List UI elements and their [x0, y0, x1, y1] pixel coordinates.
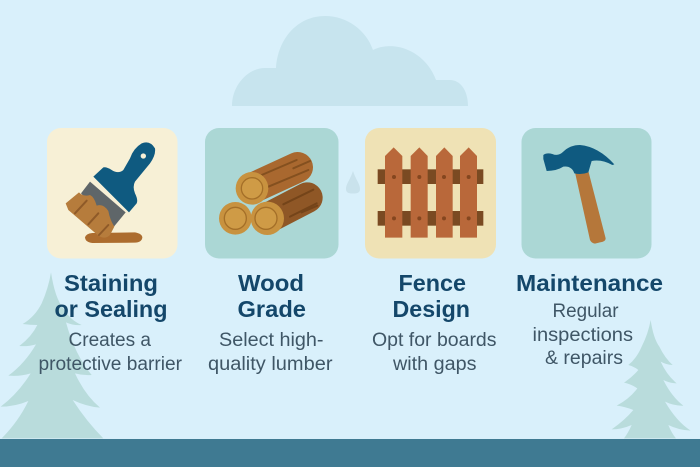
description: fence design: with gaps — [392, 354, 476, 375]
description: fence design — [372, 330, 496, 375]
panel: maintenance icon card — [522, 128, 652, 258]
icon: log pile — [219, 160, 317, 235]
text: staining or sealing — [38, 270, 183, 375]
heading: staining or sealing — [54, 270, 168, 322]
heading: staining or sealing: Staining — [64, 270, 158, 296]
cloud — [232, 16, 468, 106]
description: fence design: Opt for boards — [372, 330, 496, 351]
icon: picket fence — [378, 147, 483, 238]
heading: wood grade: Grade — [238, 296, 306, 322]
log end: left — [219, 202, 252, 235]
log end: right — [251, 202, 284, 235]
description: maintenance: & repairs — [545, 348, 623, 369]
description: wood grade: quality lumber — [208, 354, 333, 375]
heading: maintenance: Maintenance — [516, 270, 663, 296]
icon: hammer — [543, 145, 614, 244]
description: wood grade — [208, 330, 333, 375]
panel: staining icon card — [47, 128, 178, 258]
description: maintenance: inspections — [532, 325, 633, 346]
description: staining — [38, 330, 183, 375]
description: staining: Creates a — [68, 330, 151, 351]
description: maintenance — [532, 301, 633, 369]
log end: top — [236, 172, 268, 205]
heading: fence design: Design — [392, 296, 470, 322]
description: staining: protective barrier — [38, 354, 183, 375]
icon: paint brush — [66, 142, 155, 243]
panel: wood grade icon card — [205, 128, 338, 258]
water drop — [346, 171, 360, 194]
left tree — [1, 272, 103, 438]
text: fence design — [372, 270, 496, 375]
description: wood grade: Select high- — [219, 330, 324, 351]
text: wood grade — [208, 270, 333, 375]
heading: fence design: Fence — [398, 270, 466, 296]
ground band — [0, 439, 700, 467]
heading: wood grade — [238, 270, 306, 322]
panel: fence icon card — [365, 128, 496, 258]
text: maintenance — [516, 270, 663, 369]
heading: fence design — [392, 270, 470, 322]
description: maintenance: Regular — [552, 301, 619, 322]
heading: wood grade: Wood — [238, 270, 304, 296]
right tree — [612, 320, 691, 438]
heading: staining or sealing: or Sealing — [54, 296, 168, 322]
